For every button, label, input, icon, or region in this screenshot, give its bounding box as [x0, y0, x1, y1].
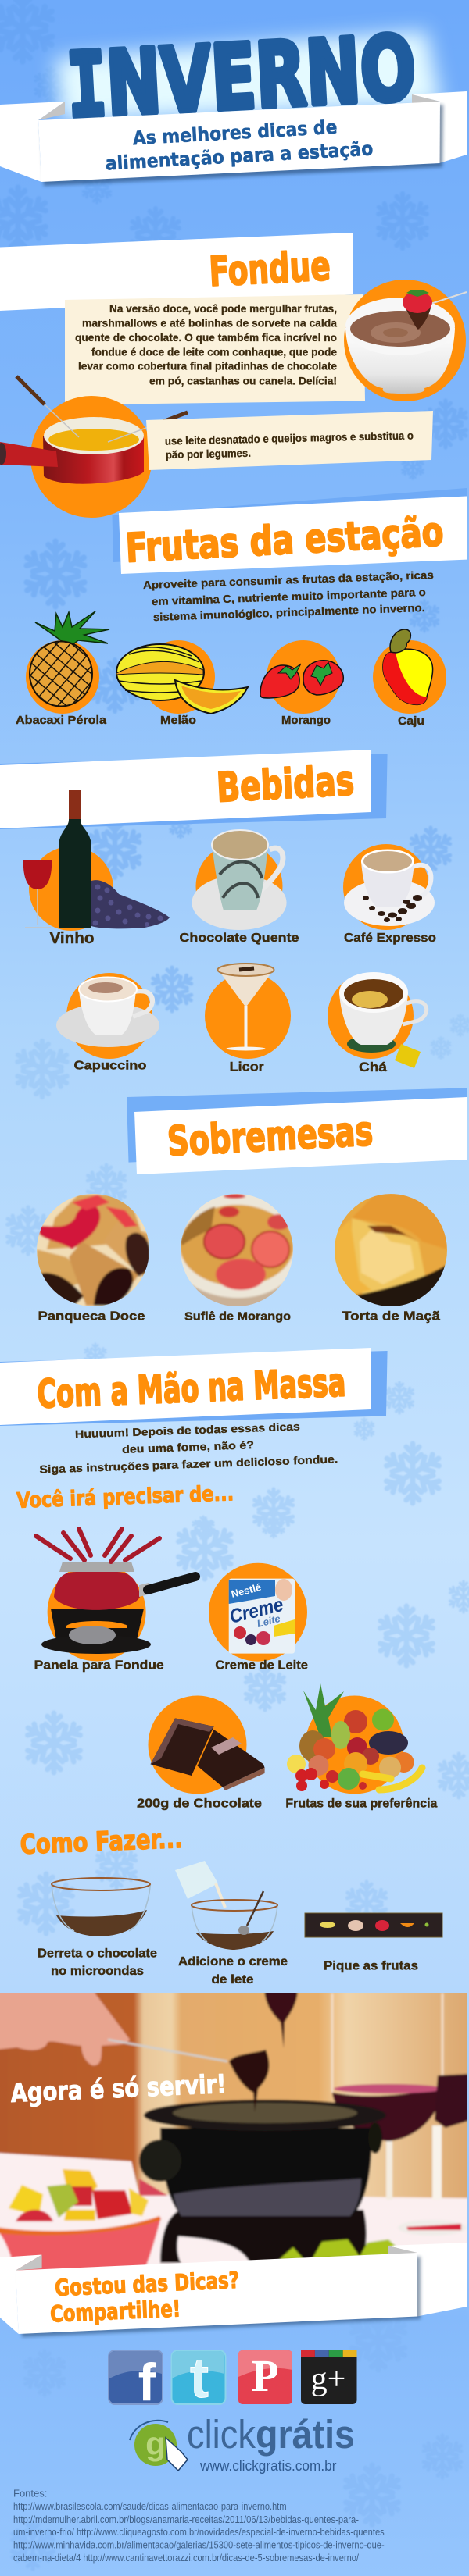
icon: pinterest — [238, 2350, 292, 2404]
label: Melão — [160, 714, 196, 727]
fondue paragraph: Na versão doce, você pode mergulhar frutas, — [109, 302, 337, 315]
label: Caju — [398, 714, 424, 728]
icon: bowl with cream — [175, 1861, 277, 1950]
icon: cream can: Creme — [227, 1594, 285, 1628]
fork — [108, 2040, 227, 2061]
fondue paragraph: em pó, castanhas ou canela. Delícia! — [149, 374, 337, 387]
icon: red fondue pan — [0, 376, 188, 518]
front shadow — [19, 2257, 421, 2337]
photo: panqueca doce — [35, 1192, 151, 1308]
fondue pot — [160, 2128, 371, 2216]
heading band — [134, 1097, 467, 1174]
ribbon folds — [38, 94, 440, 120]
bottom ribbon — [0, 2243, 467, 2337]
label: Pique as frutas — [324, 1959, 418, 1972]
label: Licor — [230, 1059, 264, 1074]
label: Café Expresso — [344, 932, 436, 945]
icon: fruit pile — [287, 1683, 422, 1794]
heading: Sobremesas — [166, 1108, 374, 1166]
sources: cabem-na-dieta/4 http://www.cantinavettorazzi.com.br/dicas-de-5-sobremesas-de-inverno/ — [13, 2552, 359, 2564]
icon: twitter — [172, 2347, 225, 2410]
label: de lete — [211, 1973, 254, 1986]
tip text: pão por legumes. — [166, 447, 251, 461]
label: Chocolate Quente — [180, 932, 299, 945]
label: Morango — [281, 714, 331, 727]
icon: cream can — [209, 1563, 307, 1662]
tip box — [146, 411, 433, 470]
heading band — [0, 233, 353, 311]
logo text: click — [187, 2412, 256, 2457]
front ribbon — [16, 2253, 417, 2334]
label: Capuccino — [73, 1059, 147, 1073]
subtitle line 2: alimentação para a estação — [105, 137, 374, 175]
icon: pinterest: P — [251, 2350, 279, 2401]
fondue paragraph: quente de chocolate. O que também fica incrível no — [75, 331, 337, 344]
panel: com a mão na massa — [0, 1348, 442, 1986]
icon: pineapple — [26, 611, 109, 714]
logo text bold: grátis — [256, 2412, 355, 2457]
social icons — [109, 2347, 356, 2412]
logo mark — [130, 2421, 188, 2471]
label: Chá — [359, 1060, 388, 1074]
intro text: Huuuum! Depois de todas essas dicas — [75, 1420, 300, 1441]
icon: twitter: t — [190, 2347, 209, 2410]
heading band shadow — [0, 1351, 388, 1426]
heading band shadow — [113, 488, 467, 562]
icon: chocolate bowl — [344, 280, 467, 401]
photo background wall — [0, 1990, 469, 2216]
snowflakes top — [0, 0, 469, 1011]
chocolate drip — [264, 1990, 298, 2048]
subheading: Você irá precisar de... — [16, 1481, 234, 1513]
hand — [0, 1990, 130, 2065]
icon: google plus: g+ — [311, 2361, 345, 2397]
tablecloth — [0, 2153, 469, 2280]
title glow — [55, 31, 442, 121]
heading band — [0, 1348, 371, 1425]
photo: torta de maçã — [333, 1192, 449, 1308]
heading Fondue: Fondue — [208, 243, 331, 296]
panel: frutas da estação — [16, 488, 467, 728]
fondue paragraph — [75, 302, 337, 387]
title: agora é só servir: Agora é só servir! — [10, 2068, 227, 2108]
sources — [13, 2487, 385, 2564]
label: Derreta o chocolate — [38, 1947, 157, 1960]
paragraph: em vitamina C, nutriente muito importante para o — [152, 586, 426, 607]
icon: hot chocolate — [192, 830, 287, 930]
icon: facebook: f — [138, 2353, 156, 2412]
label: Creme de Leite — [215, 1659, 308, 1673]
front ribbon shadow — [41, 105, 443, 186]
wine glasses — [332, 1993, 469, 2236]
sources: um-inverno-frio/ http://www.cliqueagosto.com.br/novidades/especial-de-inverno-bebidas-quentes — [13, 2526, 385, 2538]
snowflakes middle — [5, 1014, 469, 1933]
icon: strawberries — [260, 640, 343, 714]
icon: chocolate bars — [149, 1696, 265, 1794]
fondue paragraph: fondue é doce de leite com conhaque, que pode — [91, 345, 337, 358]
title block — [0, 16, 467, 186]
panel: sobremesas — [35, 1088, 467, 1324]
icon: cream can: Nestlé — [230, 1581, 263, 1600]
icon: espresso — [343, 844, 435, 930]
text: Gostou das Dicas? — [54, 2267, 240, 2301]
heading band — [0, 750, 371, 828]
sources: Fontes: — [13, 2487, 47, 2499]
fruits — [9, 2169, 149, 2221]
photo: suflê de morango — [179, 1192, 295, 1308]
fruit bowl — [0, 2218, 161, 2271]
text: Compartilhe! — [49, 2295, 181, 2328]
logo: clickgrátis — [130, 2412, 355, 2474]
sources: http://mdemulher.abril.com.br/blogs/anamaria-receitas/2011/06/13/bebidas-quentes-para- — [13, 2514, 359, 2525]
folds — [16, 2246, 417, 2271]
tip text — [165, 429, 414, 461]
paragraph — [143, 568, 434, 623]
label: Abacaxi Pérola — [16, 714, 107, 727]
intro text: Siga as instruções para fazer um delicioso fondue. — [39, 1452, 338, 1476]
intro text: deu uma fome, não é? — [122, 1438, 254, 1455]
icon: bowl with melted chocolate — [52, 1878, 150, 1936]
paragraph: sistema imunológico, principalmente no inverno. — [153, 601, 425, 623]
text box — [65, 294, 365, 404]
kiwi slices — [280, 2239, 399, 2259]
label: Frutas de sua preferência — [285, 1797, 437, 1810]
icon: wine — [23, 790, 170, 931]
fondue paragraph: marshmallows e até bolinhas de sorvete na calda — [82, 316, 337, 329]
label: Adicione o creme — [178, 1955, 288, 1969]
label: Panqueca Doce — [38, 1310, 145, 1324]
icon: cappuccino — [56, 973, 159, 1059]
back ribbon ends — [0, 2243, 467, 2334]
panel: serving photo — [0, 1990, 469, 2280]
label: Panela para Fondue — [34, 1659, 164, 1673]
logo url: www.clickgratis.com.br — [199, 2458, 337, 2474]
icon: chopped fruit board — [305, 1913, 442, 1937]
icon: google plus — [301, 2350, 356, 2404]
stand — [160, 2210, 367, 2263]
icon: melon — [116, 640, 248, 714]
icon: cashew — [373, 629, 446, 714]
panel: fondue — [0, 233, 467, 518]
snowflakes bottom — [9, 2311, 464, 2569]
subtitle line 1: As melhores dicas de — [132, 116, 338, 149]
logo mark: g — [145, 2425, 166, 2462]
icon: liqueur — [205, 964, 291, 1059]
icon: facebook — [109, 2350, 163, 2412]
heading band — [119, 497, 467, 574]
panel: bebidas — [0, 750, 436, 1074]
heading: Bebidas — [216, 757, 356, 812]
label: Suflê de Morango — [184, 1310, 291, 1324]
tip text: use leite desnatado e queijos magros e substitua o — [165, 429, 414, 447]
back ribbon ends — [0, 91, 467, 182]
label: 200g de Chocolate — [137, 1797, 262, 1810]
heading band shadow — [127, 1088, 467, 1163]
front ribbon — [38, 102, 440, 182]
subheading: Como Fazer... — [20, 1823, 183, 1861]
fondue paragraph: levar como cobertura final pitadinhas de chocolate — [78, 359, 337, 372]
paragraph: Aproveite para consumir as frutas da estação, ricas — [143, 568, 434, 591]
sources: http://www.brasilescola.com/saude/dicas-alimentacao-para-inverno.htm — [13, 2500, 287, 2512]
heading band shadow — [0, 754, 388, 829]
label: Vinho — [50, 930, 94, 947]
intro text — [39, 1420, 338, 1476]
icon: tea — [328, 972, 427, 1068]
icon: fondue set — [36, 1529, 195, 1662]
icon: cream can: Leite — [256, 1612, 281, 1630]
label: no microondas — [51, 1965, 144, 1978]
dipped fruit — [229, 2050, 269, 2112]
label: Torta de Maçã — [342, 1310, 440, 1324]
sources: http://www.minhavida.com.br/alimentacao/galerias/15300-sete-alimentos-tipicos-de-inverno-que- — [13, 2539, 385, 2550]
